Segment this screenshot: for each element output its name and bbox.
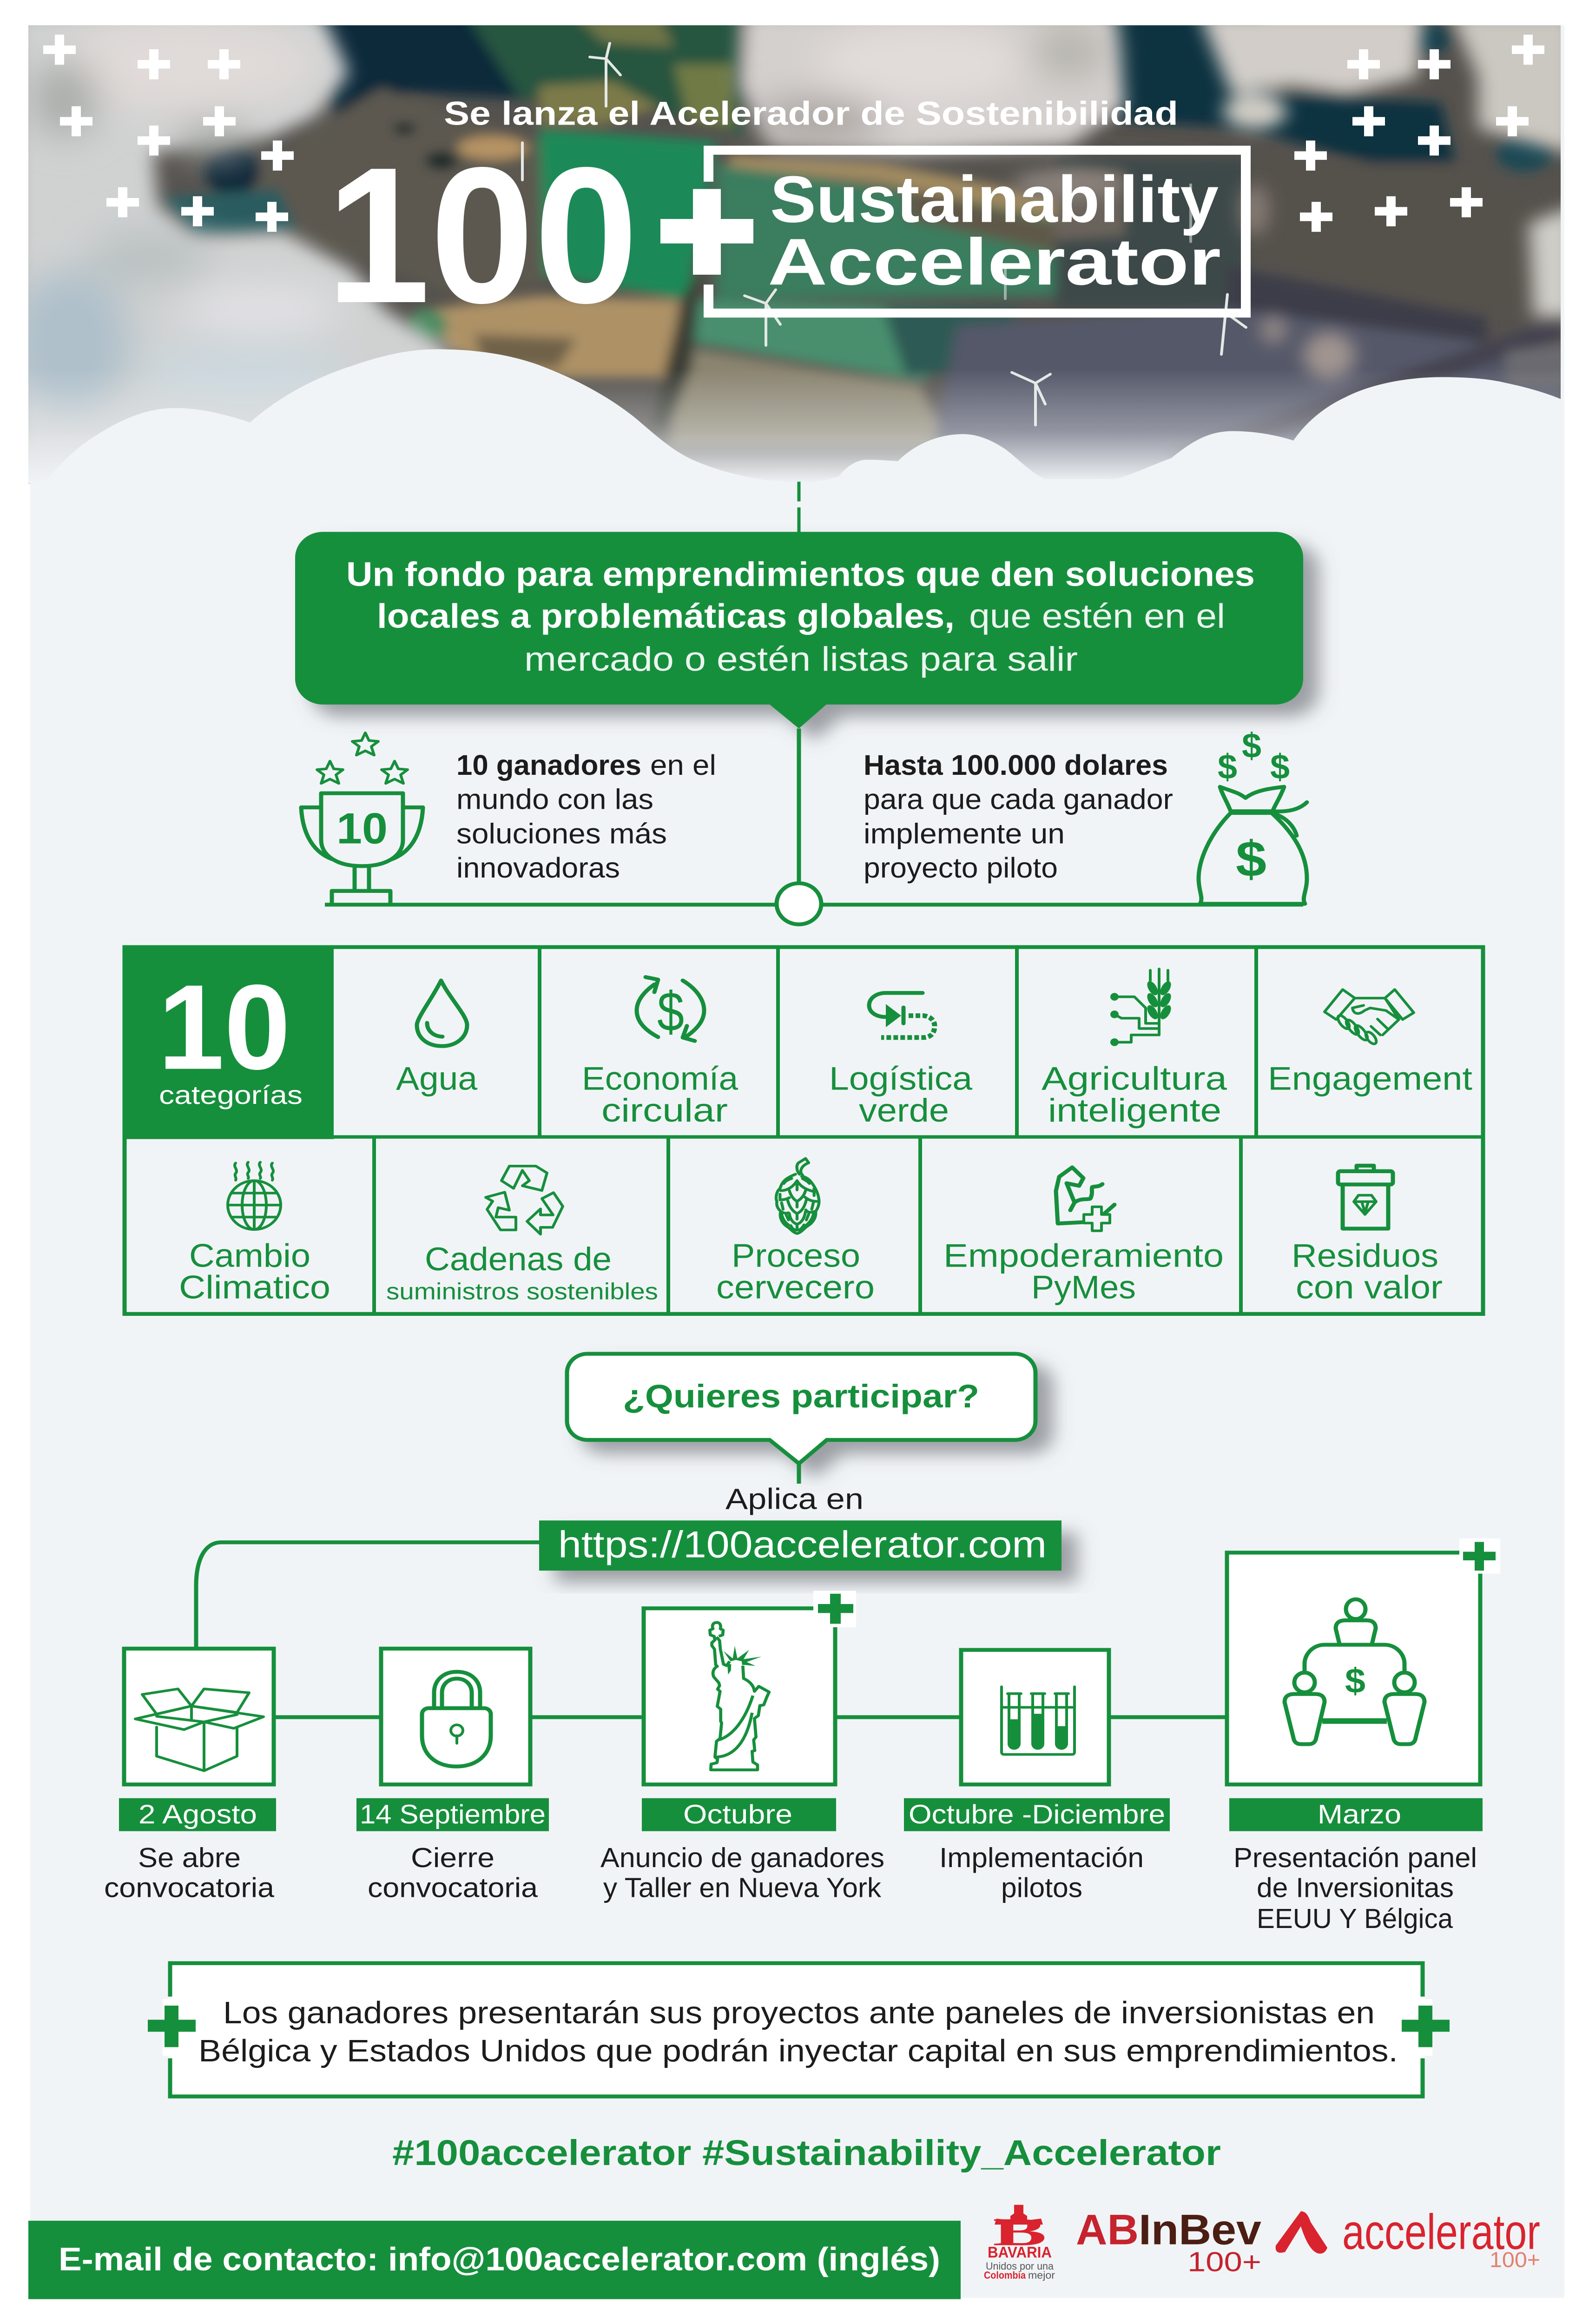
category: Residuos con valor: con valor — [1296, 1269, 1443, 1306]
counter cell: 10 categorias — [124, 945, 334, 1139]
icon: plus — [813, 1591, 856, 1627]
step 1: 2 Agosto: Se abre — [138, 1842, 241, 1874]
text: aplica en: Aplica en — [725, 1483, 864, 1515]
category: Economia circular — [582, 977, 738, 1129]
text: 10 ganadores: 10 ganadores — [456, 750, 641, 781]
hashtags: #100accelerator #Sustainability_Accelerator — [392, 2133, 1221, 2173]
text: hasta 100.000 dolares: implemente un — [864, 819, 1065, 850]
icon: money bag: $ — [1236, 831, 1266, 887]
header photo: aerial fields and clouds — [9, 13, 1576, 489]
step 5: Marzo: de Inversionitas — [1257, 1873, 1454, 1903]
panel: 10 categorias grid — [124, 945, 1483, 1314]
title logo: 100+ Sustainability Accelerator: 100 — [326, 127, 638, 343]
logo: Bavaria: B — [993, 2211, 1047, 2254]
logo: Bavaria: Unidos por una — [986, 2260, 1054, 2272]
text: 10 ganadores: innovadoras — [456, 853, 620, 884]
step 5: Marzo: Marzo — [1318, 1799, 1401, 1829]
step 4: Octubre - Diciembre — [904, 1650, 1170, 1903]
category: Cambio Climatico: Climatico — [179, 1269, 330, 1306]
callout: fund description: mercado o estén listas para salir — [524, 640, 1078, 678]
category: Logistica verde: Logística — [829, 1061, 972, 1097]
counter cell: 10 categorias: categorías — [159, 1081, 303, 1110]
category: Logistica verde — [829, 993, 972, 1129]
icon: money bag: $ — [1242, 726, 1261, 765]
icon: money bag: $ — [1270, 747, 1290, 786]
footer contact bar: E-mail de contacto: info@100accelerator.com (inglés) — [59, 2241, 940, 2278]
category: Agricultura inteligente — [1042, 969, 1227, 1129]
category: Engagement: Engagement — [1268, 1061, 1472, 1097]
icon: trophy with stars: 10 — [336, 804, 388, 853]
category: Proceso cervecero: cervecero — [716, 1269, 875, 1306]
step 5: Marzo — [1227, 1538, 1500, 1934]
clouds silhouette — [30, 349, 1564, 557]
category: Engagement — [1268, 990, 1472, 1097]
panel: investors note: Bélgica y Estados Unidos que podrán inyectar capital en sus emprendimientos. — [198, 2033, 1398, 2068]
text: 10 ganadores: mundo con las — [456, 784, 653, 815]
category: Cadenas de suministros sostenibles — [386, 1166, 658, 1305]
connector line top — [798, 482, 800, 534]
logo: Bavaria: mejor — [1028, 2269, 1055, 2281]
callout: fund description: Un fondo para emprendimientos que den soluciones — [346, 555, 1255, 594]
category: Cadenas de suministros sostenibles: suministros sostenibles — [386, 1279, 658, 1305]
icon: padlock — [422, 1672, 491, 1766]
step 3: Octubre: Anuncio de ganadores — [600, 1842, 884, 1874]
step 5: Marzo: EEUU Y Bélgica — [1257, 1903, 1453, 1934]
text: hasta 100.000 dolares: Hasta 100.000 dolares — [864, 750, 1168, 781]
step 4: Octubre - Diciembre: Octubre -Diciembre — [909, 1799, 1165, 1829]
step 2: 14 Septiembre: 14 Septiembre — [360, 1799, 546, 1829]
text: hasta 100.000 dolares — [864, 750, 1173, 884]
callout: quieres participar — [567, 1354, 1035, 1484]
callout: fund description: locales a problemáticas globales, — [377, 597, 955, 635]
category: Agua: Agua — [396, 1061, 477, 1097]
category: Economia circular: circular — [601, 1093, 728, 1129]
timeline spine with circle — [325, 728, 1303, 924]
icon: left plus — [148, 2006, 196, 2047]
callout: fund description — [295, 532, 1303, 728]
step 1: 2 Agosto: 2 Agosto — [138, 1799, 257, 1829]
text: 10 ganadores: en el — [650, 750, 716, 781]
category: Agua — [396, 981, 477, 1097]
category: Residuos con valor: Residuos — [1292, 1238, 1438, 1274]
panel: investors note — [148, 1961, 1450, 2098]
category: Logistica verde: verde — [859, 1093, 949, 1129]
category: Cadenas de suministros sostenibles: Cadenas de — [425, 1241, 612, 1277]
counter cell: 10 categorias: 10 — [158, 960, 290, 1095]
timeline line — [274, 1715, 1227, 1719]
logo: accelerator 100+ — [1276, 2204, 1540, 2272]
decorative white plus signs — [43, 35, 1544, 232]
icon: trophy with stars — [301, 733, 423, 903]
category: Proceso cervecero: Proceso — [732, 1238, 860, 1274]
step 2: 14 Septiembre: Cierre — [411, 1842, 495, 1874]
logo: accelerator 100+: 100+ — [1490, 2248, 1540, 2272]
icon: investor panel: $ — [1345, 1661, 1365, 1700]
icon: plus — [1459, 1538, 1500, 1574]
title logo: 100+ Sustainability Accelerator — [326, 127, 1246, 343]
step 1: 2 Agosto: convocatoria — [104, 1873, 275, 1903]
icon: investor panel — [1285, 1599, 1424, 1744]
step 5: Marzo: Presentación panel — [1233, 1842, 1477, 1874]
text: 10 ganadores: soluciones más — [456, 819, 667, 850]
step 4: Octubre - Diciembre: Implementación — [939, 1842, 1144, 1874]
icon: test tubes — [1002, 1687, 1075, 1755]
step 2: 14 Septiembre: convocatoria — [368, 1873, 538, 1903]
url button: https://100accelerator.com — [558, 1523, 1047, 1565]
logo: Bavaria: Colombia — [984, 2269, 1026, 2281]
icon: money bag: $ — [1218, 747, 1237, 786]
step 1: 2 Agosto — [104, 1649, 276, 1903]
header subtitle: Se lanza el Acelerador de Sostenibilidad — [444, 94, 1178, 132]
logo: ABInBev 100+: 100+ — [1187, 2247, 1261, 2278]
step 3: Octubre — [600, 1591, 884, 1903]
logo: ABInBev 100+: InBev — [1139, 2206, 1262, 2254]
text: hasta 100.000 dolares: para que cada ganador — [864, 784, 1173, 815]
logo: ABInBev 100+: AB — [1076, 2206, 1139, 2254]
callout: fund description: que estén en el — [969, 597, 1225, 635]
category: Proceso cervecero — [716, 1158, 875, 1306]
wind turbines — [522, 43, 1246, 425]
logo: Bavaria — [984, 2205, 1055, 2281]
icon: open box — [135, 1689, 264, 1771]
fade to panel — [28, 369, 1564, 483]
category: Empoderamiento PyMes: Empoderamiento — [943, 1238, 1224, 1274]
category: Residuos con valor — [1292, 1166, 1443, 1306]
title logo: 100+ Sustainability Accelerator: Accelerator — [768, 225, 1221, 299]
callout: quieres participar: ¿Quieres participar? — [623, 1379, 979, 1414]
category: Economia circular: Economía — [582, 1061, 738, 1097]
panel: investors note: Los ganadores presentarán sus proyectos ante paneles de inversionistas en — [223, 1995, 1375, 2030]
logo: ABInBev 100+ — [1076, 2206, 1262, 2278]
text: hasta 100.000 dolares: proyecto piloto — [864, 853, 1058, 884]
category: Empoderamiento PyMes — [943, 1168, 1224, 1306]
icon: money bag — [1199, 726, 1307, 904]
icon: right plus — [1402, 2006, 1450, 2047]
category: Cambio Climatico: Cambio — [189, 1238, 310, 1274]
step 4: Octubre - Diciembre: pilotos — [1001, 1873, 1082, 1903]
category: Cambio Climatico — [179, 1162, 330, 1306]
category: Agricultura inteligente: inteligente — [1048, 1093, 1221, 1129]
step 3: Octubre: y Taller en Nueva York — [603, 1873, 881, 1903]
text: 10 ganadores — [456, 750, 716, 884]
footer contact bar — [28, 2221, 961, 2299]
logo: Bavaria: BAVARIA — [988, 2244, 1052, 2261]
icon: statue of liberty — [710, 1623, 769, 1770]
connector from URL to first step — [196, 1542, 541, 1649]
title logo: 100+ Sustainability Accelerator: Sustainability — [770, 163, 1219, 236]
category: Agricultura inteligente: Agricultura — [1042, 1061, 1227, 1097]
category: Empoderamiento PyMes: PyMes — [1031, 1269, 1136, 1306]
step 3: Octubre: Octubre — [683, 1799, 792, 1829]
category: Economia circular: $ — [657, 981, 684, 1043]
step 2: 14 Septiembre — [356, 1649, 549, 1903]
